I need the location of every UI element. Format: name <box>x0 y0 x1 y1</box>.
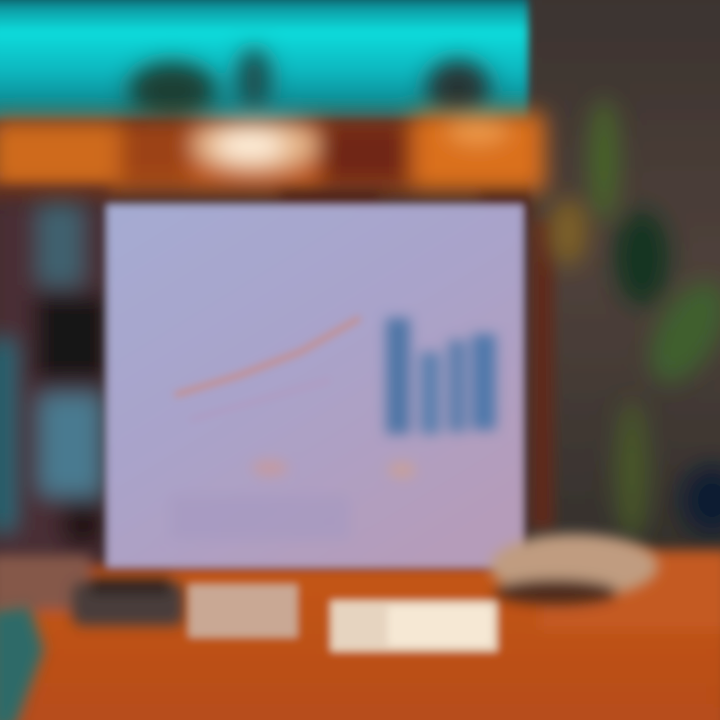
navy object at right <box>682 466 720 534</box>
dark plant silhouettes on shelf <box>128 48 490 118</box>
teal object bottom left <box>0 606 44 720</box>
teal glowing wall band <box>0 0 528 120</box>
dark object on desk <box>72 578 184 626</box>
board panel <box>106 204 524 568</box>
orange shelf <box>0 112 546 192</box>
green plant <box>548 98 720 540</box>
left bookshelf column <box>0 200 108 570</box>
lower chart marks <box>170 460 416 540</box>
right frame post <box>530 220 554 530</box>
dark shelf underside <box>0 188 530 226</box>
chart board <box>106 204 524 568</box>
orange desk surface <box>0 550 720 720</box>
beige note paper <box>188 584 298 638</box>
computer mouse <box>490 534 658 605</box>
line chart <box>175 318 360 420</box>
white note paper <box>330 600 498 652</box>
bar chart <box>386 318 496 434</box>
